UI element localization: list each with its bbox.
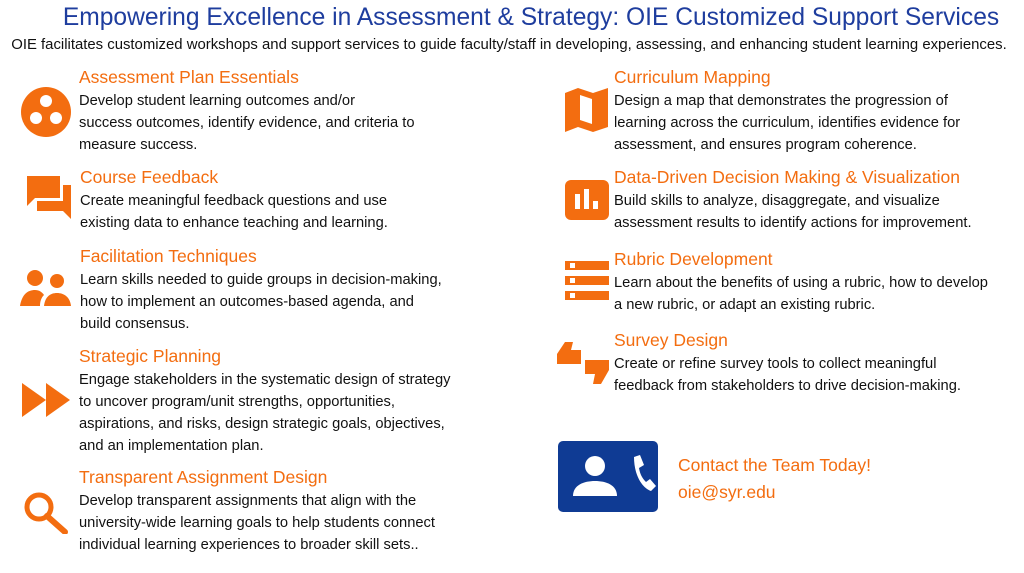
block: Strategic Planning xyxy=(79,346,450,454)
icon: facilitation xyxy=(20,270,71,306)
block: Curriculum Mapping: assessment, and ensures program coherence. xyxy=(614,137,917,153)
icon: magnifier xyxy=(24,492,68,534)
block: Course Feedback: Create meaningful feedback questions and use xyxy=(80,193,387,209)
block: Curriculum Mapping: Design a map that demonstrates the progression of xyxy=(614,93,948,109)
block: Strategic Planning: and an implementation plan. xyxy=(79,438,264,454)
block: Strategic Planning: Strategic Planning xyxy=(79,346,221,366)
block: Curriculum Mapping: Curriculum Mapping xyxy=(614,67,771,87)
block: Data-Driven: assessment results to identify actions for improvement. xyxy=(614,215,972,231)
block: Facilitation Techniques: build consensus. xyxy=(80,316,189,332)
block: Assessment Plan Essentials: Assessment Plan Essentials xyxy=(79,67,299,87)
block: Survey Design: Create or refine survey tools to collect meaningful xyxy=(614,356,936,372)
block: Transparent Assignment Design: individual learning experiences to broader skill sets.. xyxy=(79,537,419,553)
contact text: oie@syr.edu xyxy=(678,482,776,502)
block: Assessment Plan Essentials: Develop student learning outcomes and/or xyxy=(79,93,355,109)
block: Data-Driven xyxy=(614,167,972,231)
block: Facilitation Techniques: how to implement an outcomes-based agenda, and xyxy=(80,294,414,310)
title: Empowering Excellence in Assessment & Strategy: OIE Customized Support Services xyxy=(63,4,999,31)
icon: map xyxy=(565,88,608,132)
block: Assessment Plan Essentials: success outcomes, identify evidence, and criteria to xyxy=(79,115,415,131)
contact text xyxy=(678,455,871,502)
block: Facilitation Techniques: Facilitation Techniques xyxy=(80,246,257,266)
block: Data-Driven: Build skills to analyze, disaggregate, and visualize xyxy=(614,193,940,209)
block: Data-Driven: Data-Driven Decision Making & Visualization xyxy=(614,167,960,187)
block: Transparent Assignment Design xyxy=(79,467,435,553)
block: Survey Design xyxy=(614,330,961,394)
block: Course Feedback xyxy=(80,167,388,231)
block: Strategic Planning: to uncover program/unit strengths, opportunities, xyxy=(79,394,395,410)
contact text: Contact the Team Today! xyxy=(678,455,871,475)
icon: assessment plan xyxy=(21,87,71,137)
block: Survey Design: feedback from stakeholders to drive decision-making. xyxy=(614,378,961,394)
block: Curriculum Mapping: learning across the curriculum, identifies evidence for xyxy=(614,115,960,131)
block: Transparent Assignment Design: Develop transparent assignments that align with the xyxy=(79,493,416,509)
block: Course Feedback: Course Feedback xyxy=(80,167,218,187)
subtitle: OIE facilitates customized workshops and support services to guide faculty/staff in developing, assessing, and enhancing student learning experiences. xyxy=(11,37,1007,53)
block: Strategic Planning: Engage stakeholders in the systematic design of strategy xyxy=(79,372,450,388)
block: Assessment Plan Essentials: measure success. xyxy=(79,137,197,153)
block: Rubric Development: Rubric Development xyxy=(614,249,773,269)
block: Transparent Assignment Design: university-wide learning goals to help students connect xyxy=(79,515,435,531)
icon: quotes xyxy=(557,342,609,384)
block: Rubric Development xyxy=(614,249,988,313)
block: Rubric Development: a new rubric, or adapt an existing rubric. xyxy=(614,297,875,313)
icon: course feedback xyxy=(27,176,71,219)
icon: rubric list xyxy=(565,261,609,300)
block: Rubric Development: Learn about the benefits of using a rubric, how to develop xyxy=(614,275,988,291)
block: Assessment Plan Essentials xyxy=(79,67,415,153)
block: Strategic Planning: aspirations, and risks, design strategic goals, objectives, xyxy=(79,416,445,432)
block: Transparent Assignment Design: Transparent Assignment Design xyxy=(79,467,327,487)
block: Curriculum Mapping xyxy=(614,67,960,153)
icon: contact box xyxy=(558,441,658,512)
block: Course Feedback: existing data to enhance teaching and learning. xyxy=(80,215,388,231)
icon: chart xyxy=(565,180,609,220)
block: Survey Design: Survey Design xyxy=(614,330,728,350)
block: Facilitation Techniques xyxy=(80,246,442,332)
block: Facilitation Techniques: Learn skills needed to guide groups in decision-making, xyxy=(80,272,442,288)
icon: fast forward xyxy=(22,383,70,417)
